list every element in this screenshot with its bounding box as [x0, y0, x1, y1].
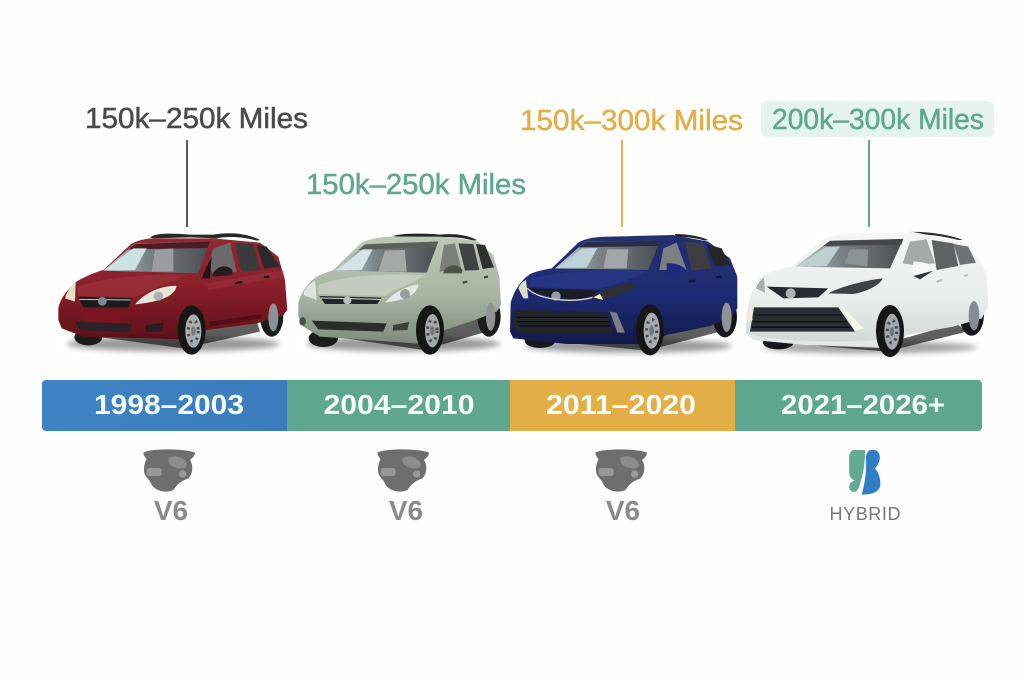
engine badge: V6 2004-2010: V6 [389, 495, 423, 526]
label: 1998-2003 mileage: 150k–250k Miles [85, 103, 308, 135]
icon: engine [377, 449, 429, 492]
van: pearl white 2021-2026 hybrid [746, 232, 988, 357]
icon: engine [595, 449, 647, 492]
van: navy 2011-2020 [510, 234, 737, 355]
label: 2004-2010 mileage: 150k–250k Miles [306, 169, 526, 201]
hybrid badge: 2021-2026: HYBRID [830, 504, 900, 524]
connector line: 1998-2003 [186, 140, 188, 227]
segment: 1998-2003: 1998–2003 [94, 389, 244, 420]
segment: 2011-2020: 2011–2020 [546, 389, 696, 420]
engine badge: V6 1998-2003 [143, 449, 195, 526]
segment: 2021-2026+: 2021–2026+ [781, 389, 945, 420]
timeline bar [42, 380, 982, 431]
segment: 2011-2020 [510, 380, 735, 431]
connector line: 2021-2026 [868, 140, 870, 227]
engine badge: V6 2004-2010 [377, 449, 429, 526]
van: sage 2004-2010 [298, 234, 501, 355]
segment: 2004-2010 [287, 380, 510, 431]
engine badge: V6 1998-2003: V6 [154, 495, 188, 526]
label: 2021-2026 mileage: 200k–300k Miles [772, 104, 984, 136]
label: 2011-2020 mileage: 150k–300k Miles [520, 105, 743, 137]
segment: 1998-2003 [42, 380, 287, 431]
hybrid badge: 2021-2026 [830, 450, 900, 524]
van: red 1998-2003 [58, 233, 287, 355]
icon: hybrid [849, 450, 880, 495]
segment: 2004-2010: 2004–2010 [324, 389, 474, 420]
engine badge: V6 2011-2020 [595, 449, 647, 526]
segment: 2021-2026+ [735, 380, 982, 431]
connector line: 2011-2020 [621, 140, 623, 227]
engine badge: V6 2011-2020: V6 [606, 495, 640, 526]
icon: engine [143, 449, 195, 492]
